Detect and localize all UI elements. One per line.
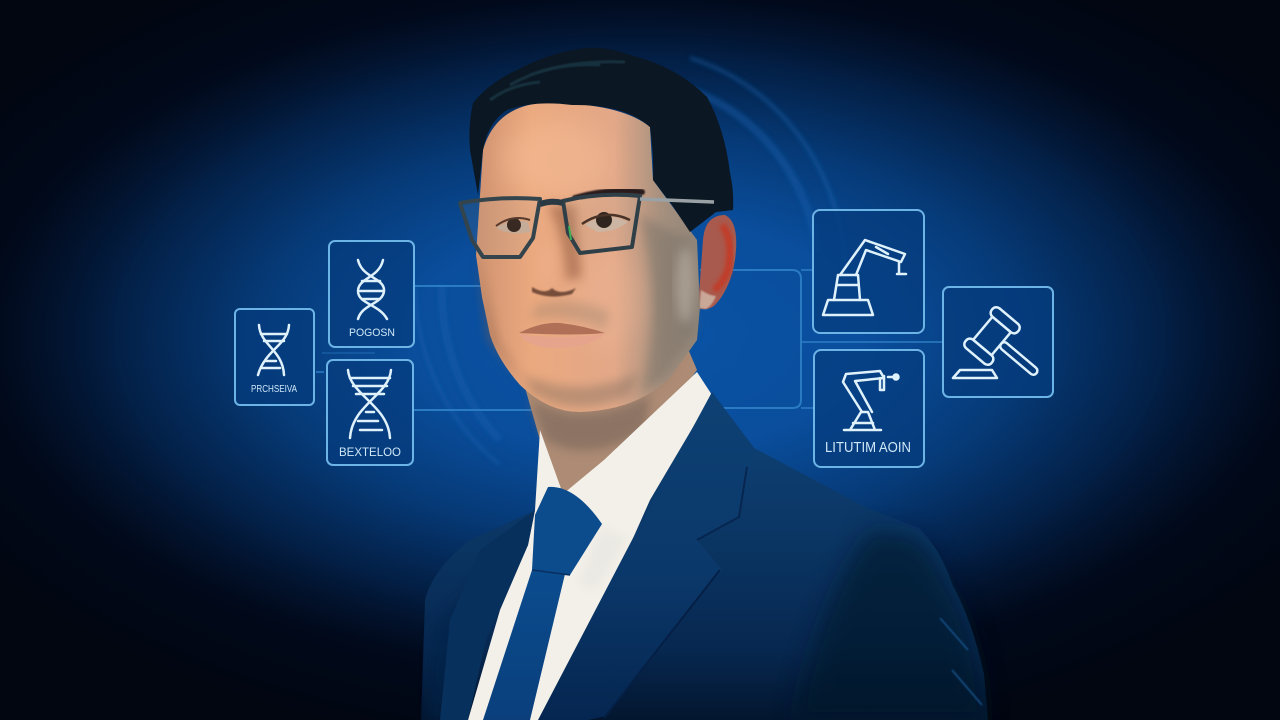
connector lines bbox=[316, 270, 943, 410]
icon: robot arm bbox=[823, 240, 906, 315]
jacket bbox=[421, 392, 988, 720]
icon: gavel bbox=[953, 305, 1053, 393]
panel: DNA top bbox=[329, 241, 414, 347]
lapel left bbox=[440, 510, 535, 720]
glasses bbox=[460, 195, 714, 257]
panel label: POGOSN bbox=[349, 327, 395, 339]
face shading bbox=[476, 122, 695, 407]
icon: DNA helix bbox=[348, 370, 391, 438]
mouth bbox=[519, 323, 605, 348]
icon: robot arm bbox=[843, 371, 898, 430]
panel: gavel bbox=[943, 287, 1053, 397]
panel label: BEXTELOO bbox=[339, 445, 401, 459]
hair bbox=[469, 48, 733, 232]
right sleeve highlights bbox=[940, 618, 982, 705]
icon: DNA helix bbox=[358, 260, 387, 319]
eyebrow bbox=[575, 191, 642, 198]
concentric arcs behind head bbox=[486, 55, 838, 462]
tie bbox=[483, 487, 602, 720]
neck shadow bbox=[530, 395, 650, 450]
lapel right bbox=[538, 392, 754, 720]
nose bbox=[532, 243, 576, 297]
panel label: LITUTIM AOIN bbox=[825, 439, 911, 456]
hair sheen bbox=[490, 62, 625, 100]
neck bbox=[520, 330, 697, 496]
shirt collar and front bbox=[468, 372, 712, 720]
face bbox=[476, 103, 700, 412]
panel label: PRCHSEIVA bbox=[251, 384, 297, 395]
panel: DNA bottom bbox=[327, 360, 413, 465]
panel: DNA small left bbox=[235, 309, 314, 405]
panel: robot arm bottom bbox=[814, 350, 924, 467]
panel: robot arm top bbox=[813, 210, 924, 333]
ear bbox=[698, 215, 736, 309]
eyes bbox=[496, 212, 630, 233]
man portrait bbox=[421, 48, 988, 720]
icon: DNA helix bbox=[258, 325, 289, 375]
